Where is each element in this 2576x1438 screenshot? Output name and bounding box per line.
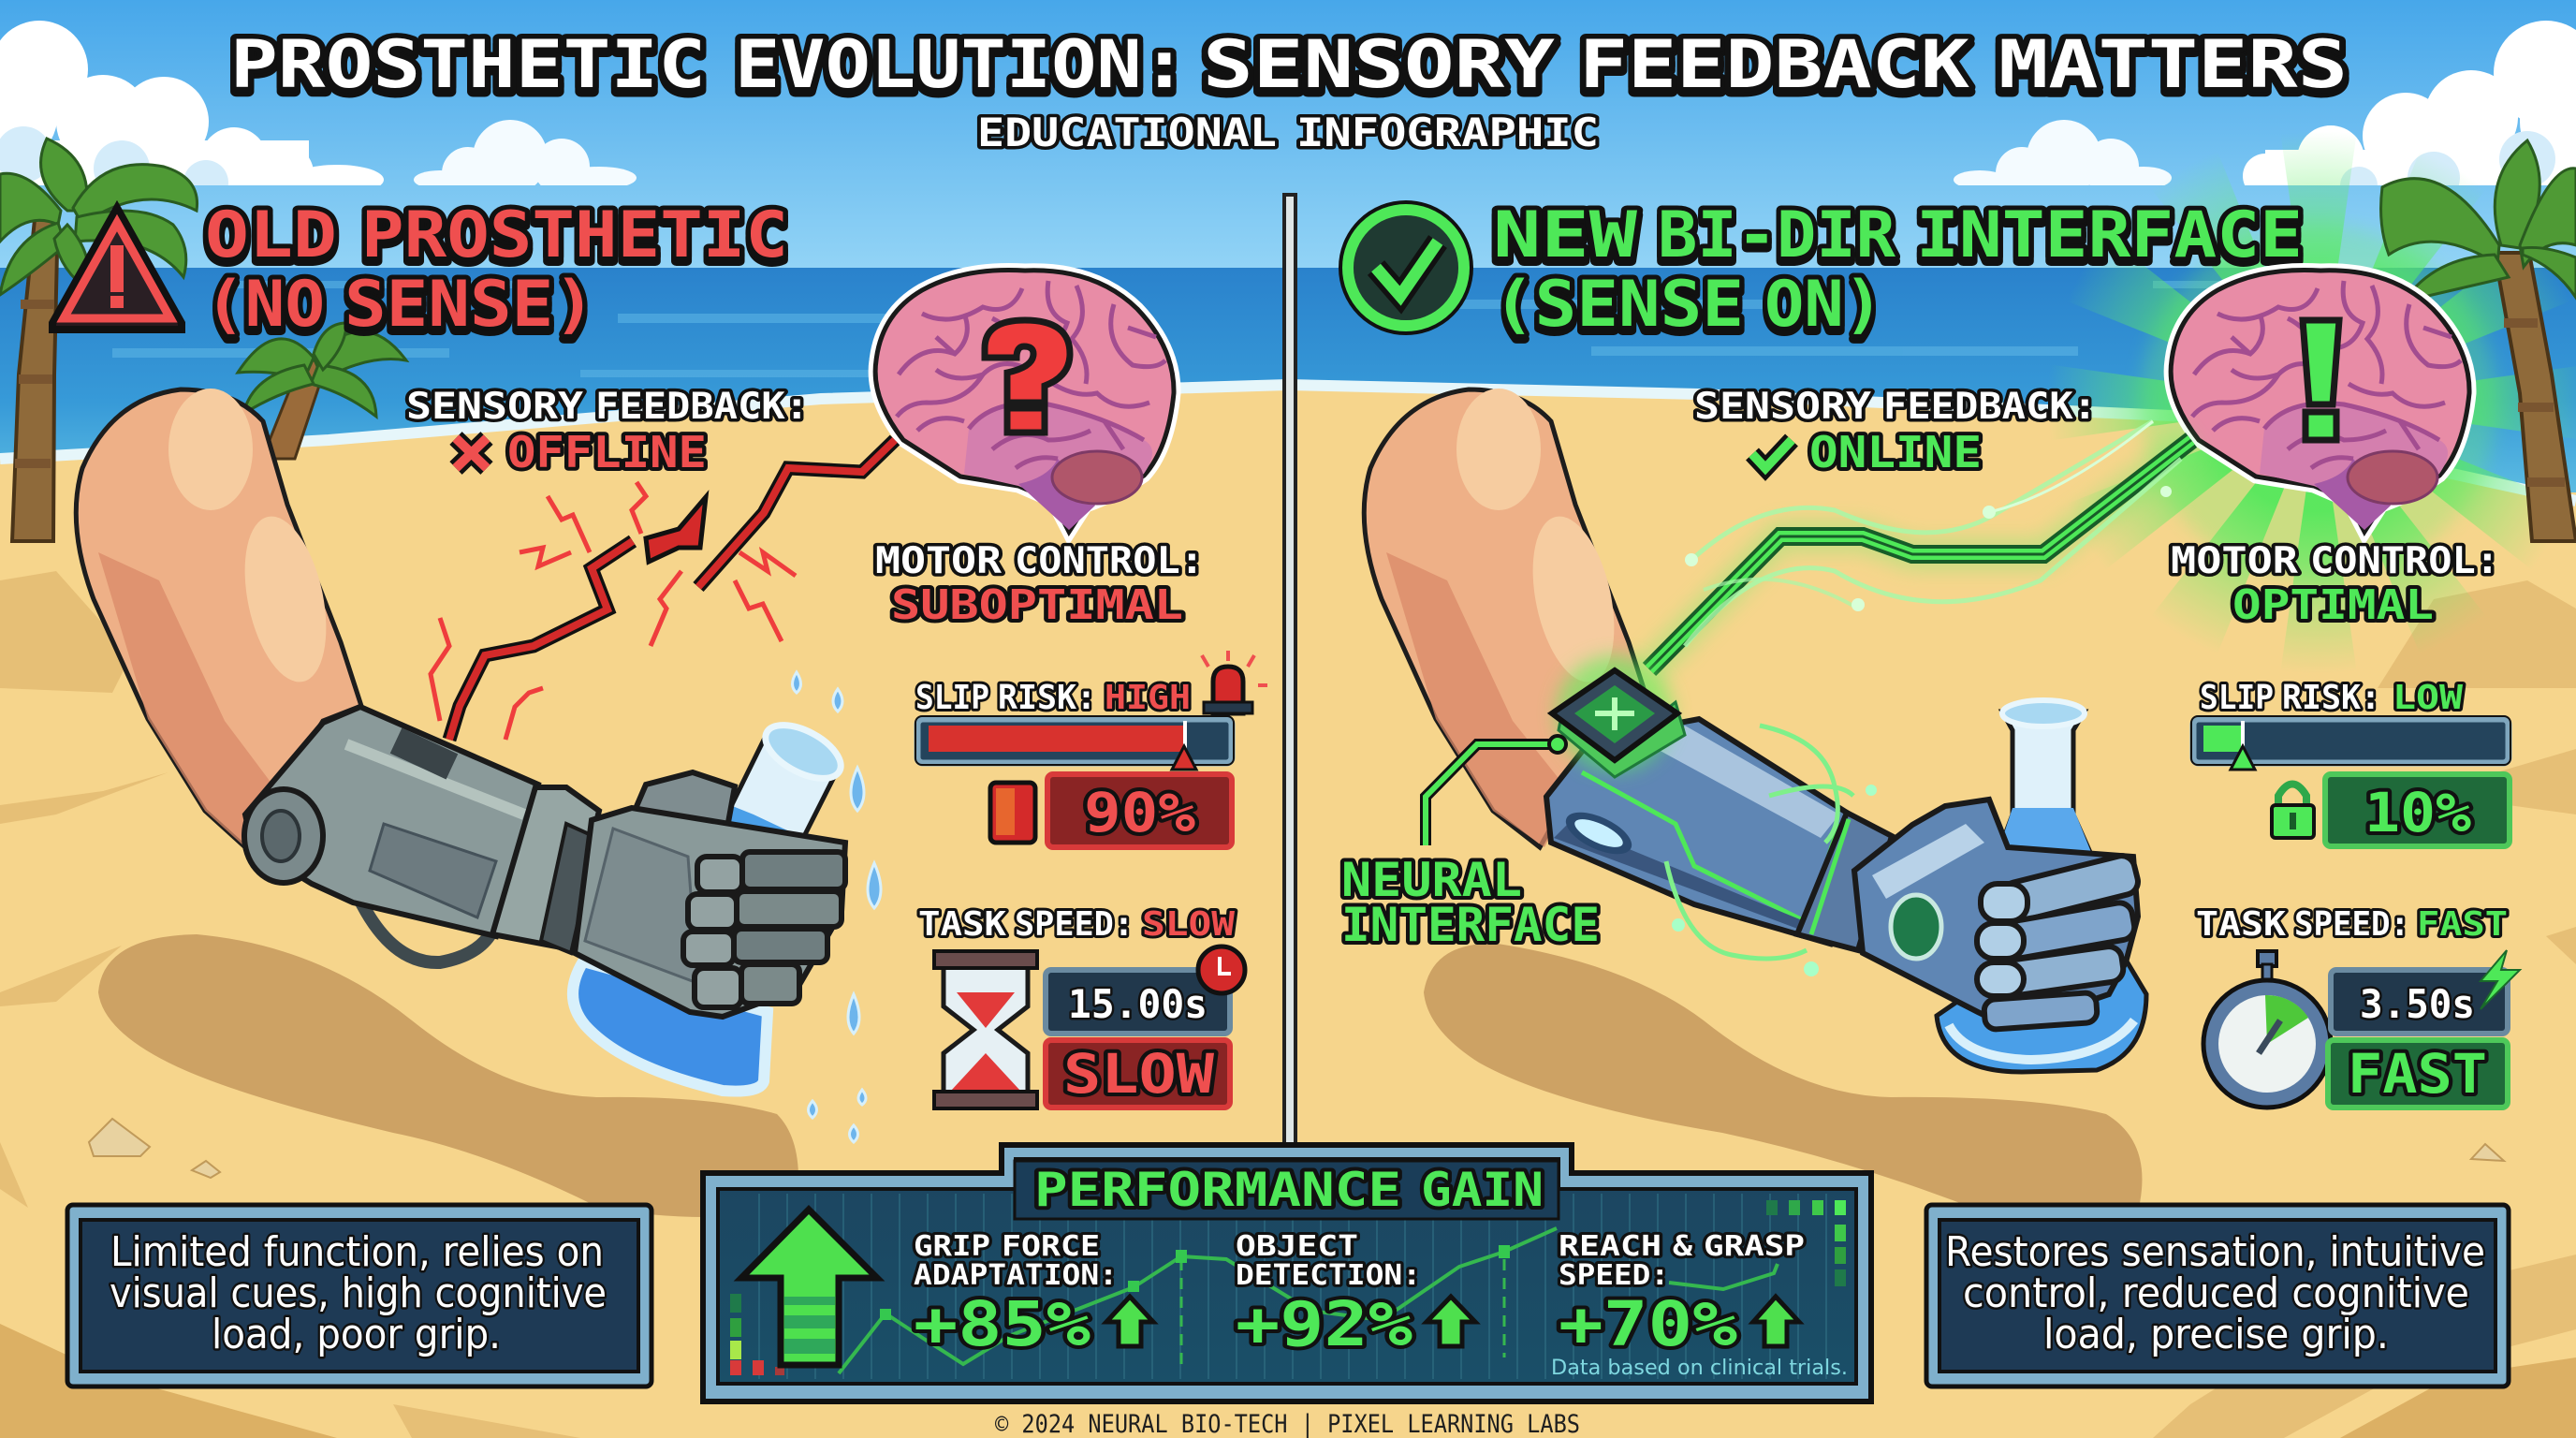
tab: performance gain heading: GAIN <box>1421 1163 1544 1217</box>
title: SENSORY <box>1203 26 1555 103</box>
icon: big green up arrow <box>741 1210 877 1365</box>
label: sensory feedback online: ONLINE <box>1809 427 1982 477</box>
slip risk gauge 10% <box>2191 716 2510 770</box>
green neural signal wires <box>1649 421 2191 669</box>
icon: hourglass <box>934 951 1037 1108</box>
value box: slow <box>1046 1040 1230 1108</box>
label: motor control suboptimal: MOTOR <box>875 540 1003 582</box>
clouds: left <box>0 21 384 185</box>
icon: stopwatch <box>2203 951 2331 1108</box>
water drops: left <box>792 672 881 1142</box>
label: motor control suboptimal: CONTROL: <box>1015 540 1204 582</box>
label: motor control suboptimal: SUBOPTIMAL <box>891 581 1183 629</box>
palm tree: right <box>2381 140 2576 541</box>
green energy swirls <box>1666 726 1853 959</box>
illustration: flask base <box>573 961 768 1092</box>
heading: old prosthetic: (NO <box>205 268 325 342</box>
icon: red clock badge <box>1198 946 1245 993</box>
background: shore foam <box>0 385 2576 501</box>
value box: slow: SLOW <box>1063 1042 1214 1106</box>
tab: performance gain heading <box>1015 1161 1559 1219</box>
value box: 90% <box>1047 774 1232 847</box>
heading: old prosthetic: OLD <box>205 198 337 272</box>
icon: question mark <box>985 320 1070 433</box>
metric: slip risk high: HIGH <box>1105 679 1191 717</box>
stat: grip force adaptation: GRIP <box>914 1230 990 1263</box>
value box: 15.00s <box>1046 970 1230 1034</box>
clouds: small left <box>414 120 637 185</box>
heading: new bi-dir interface: BI-DIR <box>1658 198 1895 272</box>
title: FEEDBACK <box>1579 26 1969 103</box>
label: motor control suboptimal <box>875 540 1204 629</box>
stat: reach and grasp speed: REACH <box>1559 1230 1661 1263</box>
value box: 10% <box>2325 774 2510 846</box>
metric: task speed slow: SPEED: <box>1015 905 1134 944</box>
title: EVOLUTION: <box>735 26 1187 103</box>
ground shadow: right arm <box>1424 944 2142 1218</box>
stat: reach and grasp speed <box>1559 1230 1805 1360</box>
stat: object detection: +92% <box>1236 1288 1412 1360</box>
label: sensory feedback offline: OFFLINE <box>507 427 707 477</box>
value box: 3.50s: 3.50s <box>2360 981 2475 1027</box>
illustration: upright flask <box>1990 700 2100 875</box>
heading: old prosthetic: PROSTHETIC <box>361 198 788 272</box>
status pixels <box>730 1200 1846 1375</box>
label: motor control optimal: MOTOR <box>2171 540 2299 582</box>
metric: slip risk low: LOW <box>2393 679 2463 717</box>
value box: fast <box>2328 1040 2508 1108</box>
illustration: brain with question mark <box>875 270 1174 532</box>
callout: old prosthetic summary <box>67 1205 651 1387</box>
slip risk gauge 90% <box>915 716 1234 770</box>
stat: grip force adaptation <box>914 1230 1153 1360</box>
illustration: grey fist <box>575 772 845 1017</box>
label: sensory feedback offline: SENSORY <box>406 386 584 428</box>
heading: old prosthetic: SENSE) <box>344 268 595 342</box>
metric: task speed fast: SPEED: <box>2294 905 2409 944</box>
icon: padlock <box>2272 785 2314 838</box>
illustration: tilted flask neck <box>713 714 849 875</box>
metric: task speed fast <box>2196 905 2520 1108</box>
stat: reach and grasp speed: +70% <box>1559 1288 1737 1360</box>
label: neural interface with leader line: INTERFACE <box>1341 898 1600 952</box>
stat: grip force adaptation: FORCE <box>1002 1230 1100 1263</box>
clouds: small right <box>1954 120 2172 185</box>
illustration: grey prosthetic arm <box>76 389 599 962</box>
title: PROSTHETIC <box>230 26 706 103</box>
metric: slip risk low <box>2191 679 2510 846</box>
heading: new bi-dir interface: INTERFACE <box>1916 198 2303 272</box>
subtitle: EDUCATIONAL <box>977 110 1277 155</box>
metric: slip risk high: RISK: <box>998 679 1096 717</box>
heading icon: check circle <box>1346 208 1466 328</box>
stat: object detection: OBJECT <box>1236 1230 1358 1263</box>
metric: task speed fast: FAST <box>2417 905 2508 944</box>
icon: siren <box>1202 651 1267 713</box>
signal node dots <box>1685 486 2172 611</box>
value box: 15.00s: 15.00s <box>1068 981 1208 1027</box>
icon: lightning bolt <box>2481 950 2520 1009</box>
title <box>230 26 2348 103</box>
panel: performance gain <box>703 1145 1871 1401</box>
illustration: blue prosthetic arm <box>1364 389 1892 950</box>
icon: neural chip <box>1552 655 1685 777</box>
red sparks <box>431 482 796 740</box>
metric: slip risk high: SLIP <box>915 679 989 717</box>
background: sand dunes and streaks <box>0 571 2576 1438</box>
stat: object detection <box>1236 1230 1475 1360</box>
value box: 90%: 90% <box>1084 781 1195 844</box>
brain rays: right <box>2041 125 2576 681</box>
label: sensory feedback offline <box>406 386 809 477</box>
heading icon: warning triangle <box>52 208 182 330</box>
label: motor control optimal <box>2171 540 2499 629</box>
background: beach sand <box>0 385 2576 1438</box>
clouds: right <box>2243 21 2576 185</box>
heading: new bi-dir interface: NEW <box>1493 198 1637 272</box>
title: MATTERS <box>1998 26 2348 103</box>
stat: reach and grasp speed: SPEED: <box>1559 1259 1669 1292</box>
skin upper arm <box>76 389 361 847</box>
footnote: clinical trials: Data based on clinical trials. <box>1551 1357 1848 1380</box>
value box: 10%: 10% <box>2364 781 2471 844</box>
subtitle: INFOGRAPHIC <box>1296 110 1599 155</box>
icon: exclamation mark <box>2303 320 2339 440</box>
background: sky <box>0 0 2576 271</box>
metric: task speed slow <box>918 905 1245 1108</box>
center divider <box>1284 195 1295 1150</box>
heading: new bi-dir interface: ON) <box>1764 268 1883 342</box>
panel: new bi-directional interface <box>1341 198 2520 1108</box>
heading: new bi-dir interface <box>1493 198 2303 342</box>
label: motor control optimal: OPTIMAL <box>2232 581 2434 629</box>
label: neural interface with leader line <box>1341 736 1600 952</box>
metric: slip risk high <box>915 651 1267 847</box>
stat: grip force adaptation: +85% <box>914 1288 1090 1360</box>
background: sea ripples <box>112 281 2396 377</box>
icon: grip cylinder <box>990 783 1035 843</box>
small sand rocks <box>89 1119 2504 1178</box>
skin upper arm <box>1364 389 1649 847</box>
callout: new interface summary: control, reduced cognitive <box>1963 1269 2469 1317</box>
metric: task speed slow: SLOW <box>1142 905 1235 944</box>
stat: grip force adaptation: ADAPTATION: <box>914 1259 1118 1292</box>
label: sensory feedback offline: FEEDBACK: <box>595 386 809 428</box>
illustration: brain with exclamation mark <box>2171 270 2469 532</box>
label: sensory feedback online: SENSORY <box>1694 386 1872 428</box>
palm tree: small left <box>238 323 406 459</box>
broken red nerve signal <box>449 440 895 740</box>
label: sensory feedback online <box>1694 386 2097 477</box>
value box: 3.50s <box>2331 970 2508 1034</box>
stat: reach and grasp speed: & <box>1673 1230 1693 1263</box>
heading: old prosthetic <box>205 198 788 342</box>
callout: old prosthetic summary: Limited function, relies on <box>110 1228 604 1276</box>
callout: new interface summary: Restores sensation, intuitive <box>1945 1228 2485 1276</box>
trend line chart <box>839 1228 1778 1373</box>
background: sea <box>0 268 2576 492</box>
value box: fast: FAST <box>2348 1042 2487 1106</box>
stat: reach and grasp speed: GRASP <box>1704 1230 1805 1263</box>
panel: old prosthetic <box>52 198 1267 1142</box>
swirl nodes <box>1672 785 1877 976</box>
callout: old prosthetic summary: load, poor grip. <box>212 1311 501 1358</box>
label: sensory feedback online: FEEDBACK: <box>1883 386 2097 428</box>
callout: new interface summary: load, precise grip. <box>2043 1311 2389 1358</box>
tab: performance gain heading: PERFORMANCE <box>1034 1163 1401 1217</box>
illustration: flask base <box>1937 946 2146 1072</box>
metric: task speed slow: TASK <box>918 905 1006 944</box>
palm tree: large left <box>0 139 198 541</box>
metric: task speed fast: TASK <box>2196 905 2286 944</box>
metric: slip risk low: SLIP <box>2200 679 2274 717</box>
subtitle <box>977 110 1599 155</box>
label: neural interface with leader line: NEURAL <box>1341 853 1522 907</box>
stat: object detection: DETECTION: <box>1236 1259 1421 1292</box>
illustration: blue fist <box>1854 800 2141 1030</box>
metric: slip risk low: RISK: <box>2282 679 2380 717</box>
heading: new bi-dir interface: (SENSE <box>1493 268 1744 342</box>
callout: old prosthetic summary: visual cues, high cognitive <box>110 1269 607 1317</box>
callout: new interface summary <box>1926 1205 2509 1387</box>
label: motor control optimal: CONTROL: <box>2310 540 2499 582</box>
ground shadow: left arm <box>98 934 798 1217</box>
